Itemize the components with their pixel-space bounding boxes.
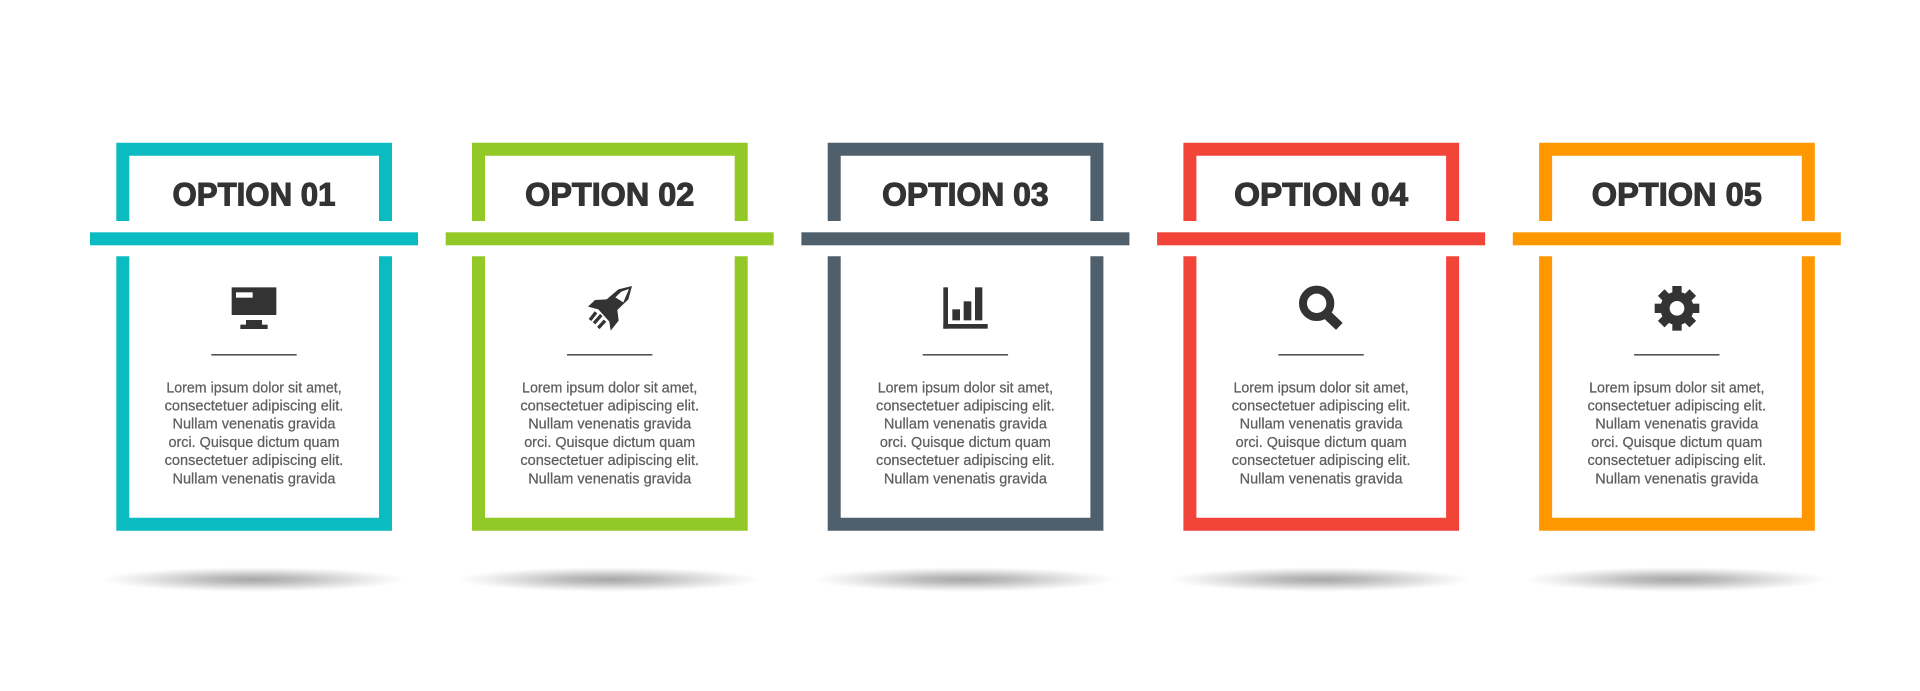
header frame [1539, 143, 1815, 221]
description text: consectetuer adipiscing elit. [1587, 398, 1766, 414]
description text: orci. Quisque dictum quam [1591, 434, 1762, 451]
description text: Lorem ipsum dolor sit amet, [166, 379, 342, 396]
description text: Nullam venenatis gravida [528, 416, 692, 433]
description text: consectetuer adipiscing elit. [876, 452, 1055, 469]
description text: consectetuer adipiscing elit. [1232, 398, 1410, 414]
body frame [1183, 256, 1459, 531]
panel: option 03 [801, 143, 1129, 592]
description text: Nullam venenatis gravida [172, 416, 336, 433]
description text: Nullam venenatis gravida [884, 416, 1048, 433]
body frame [472, 256, 748, 531]
icon: bar chart [943, 287, 988, 329]
panel: option 05 [1513, 143, 1841, 592]
description text: Lorem ipsum dolor sit amet, [522, 379, 697, 396]
header frame [828, 143, 1103, 221]
description text: consectetuer adipiscing elit. [876, 398, 1055, 414]
description text: consectetuer adipiscing elit. [165, 452, 343, 469]
description text [520, 379, 699, 487]
separator line [923, 354, 1008, 356]
icon: magnifying glass [1303, 290, 1339, 326]
description text: consectetuer adipiscing elit. [1587, 452, 1766, 469]
header frame [472, 143, 748, 221]
shadow [1524, 567, 1828, 592]
shadow [101, 567, 405, 592]
separator line [1634, 354, 1720, 356]
body frame [116, 256, 392, 531]
panel: option 01 [90, 143, 418, 592]
divider bar [1157, 232, 1485, 245]
description text [165, 379, 343, 487]
description text [1587, 379, 1766, 487]
shadow [457, 567, 761, 592]
icon: gear [1655, 286, 1699, 331]
description text: consectetuer adipiscing elit. [1232, 452, 1410, 469]
header frame [1183, 143, 1459, 221]
description text: consectetuer adipiscing elit. [520, 398, 699, 414]
body frame [1539, 256, 1815, 531]
description text [1232, 379, 1410, 487]
description text: orci. Quisque dictum quam [880, 434, 1051, 451]
heading: OPTION 02 [525, 177, 694, 213]
shadow [1168, 567, 1472, 592]
panel: option 04 [1157, 143, 1485, 592]
description text: Nullam venenatis gravida [1595, 416, 1759, 433]
heading: OPTION 05 [1592, 177, 1762, 213]
description text: orci. Quisque dictum quam [524, 434, 695, 451]
icon: rocket [588, 286, 632, 331]
description text: Nullam venenatis gravida [884, 470, 1048, 487]
divider bar [1513, 232, 1841, 245]
description text [876, 379, 1055, 487]
shadow [813, 567, 1117, 592]
description text: Lorem ipsum dolor sit amet, [878, 379, 1053, 396]
divider bar [90, 232, 418, 245]
description text: Nullam venenatis gravida [528, 470, 692, 487]
description text: consectetuer adipiscing elit. [165, 398, 343, 414]
description text: orci. Quisque dictum quam [168, 434, 339, 451]
divider bar [446, 232, 774, 245]
heading: OPTION 03 [882, 177, 1049, 213]
description text: orci. Quisque dictum quam [1236, 434, 1407, 451]
separator line [1278, 354, 1364, 356]
heading: OPTION 01 [172, 177, 335, 213]
description text: Nullam venenatis gravida [172, 470, 336, 487]
divider bar [801, 232, 1129, 245]
separator line [567, 354, 652, 356]
panel: option 02 [446, 143, 774, 592]
description text: Nullam venenatis gravida [1240, 470, 1403, 487]
heading: OPTION 04 [1234, 177, 1408, 213]
icon: monitor [232, 287, 276, 329]
description text: Lorem ipsum dolor sit amet, [1233, 379, 1409, 396]
description text: Nullam venenatis gravida [1240, 416, 1403, 433]
description text: consectetuer adipiscing elit. [520, 452, 699, 469]
header frame [116, 143, 392, 221]
description text: Lorem ipsum dolor sit amet, [1589, 379, 1764, 396]
separator line [211, 354, 297, 356]
description text: Nullam venenatis gravida [1595, 470, 1759, 487]
body frame [828, 256, 1103, 531]
